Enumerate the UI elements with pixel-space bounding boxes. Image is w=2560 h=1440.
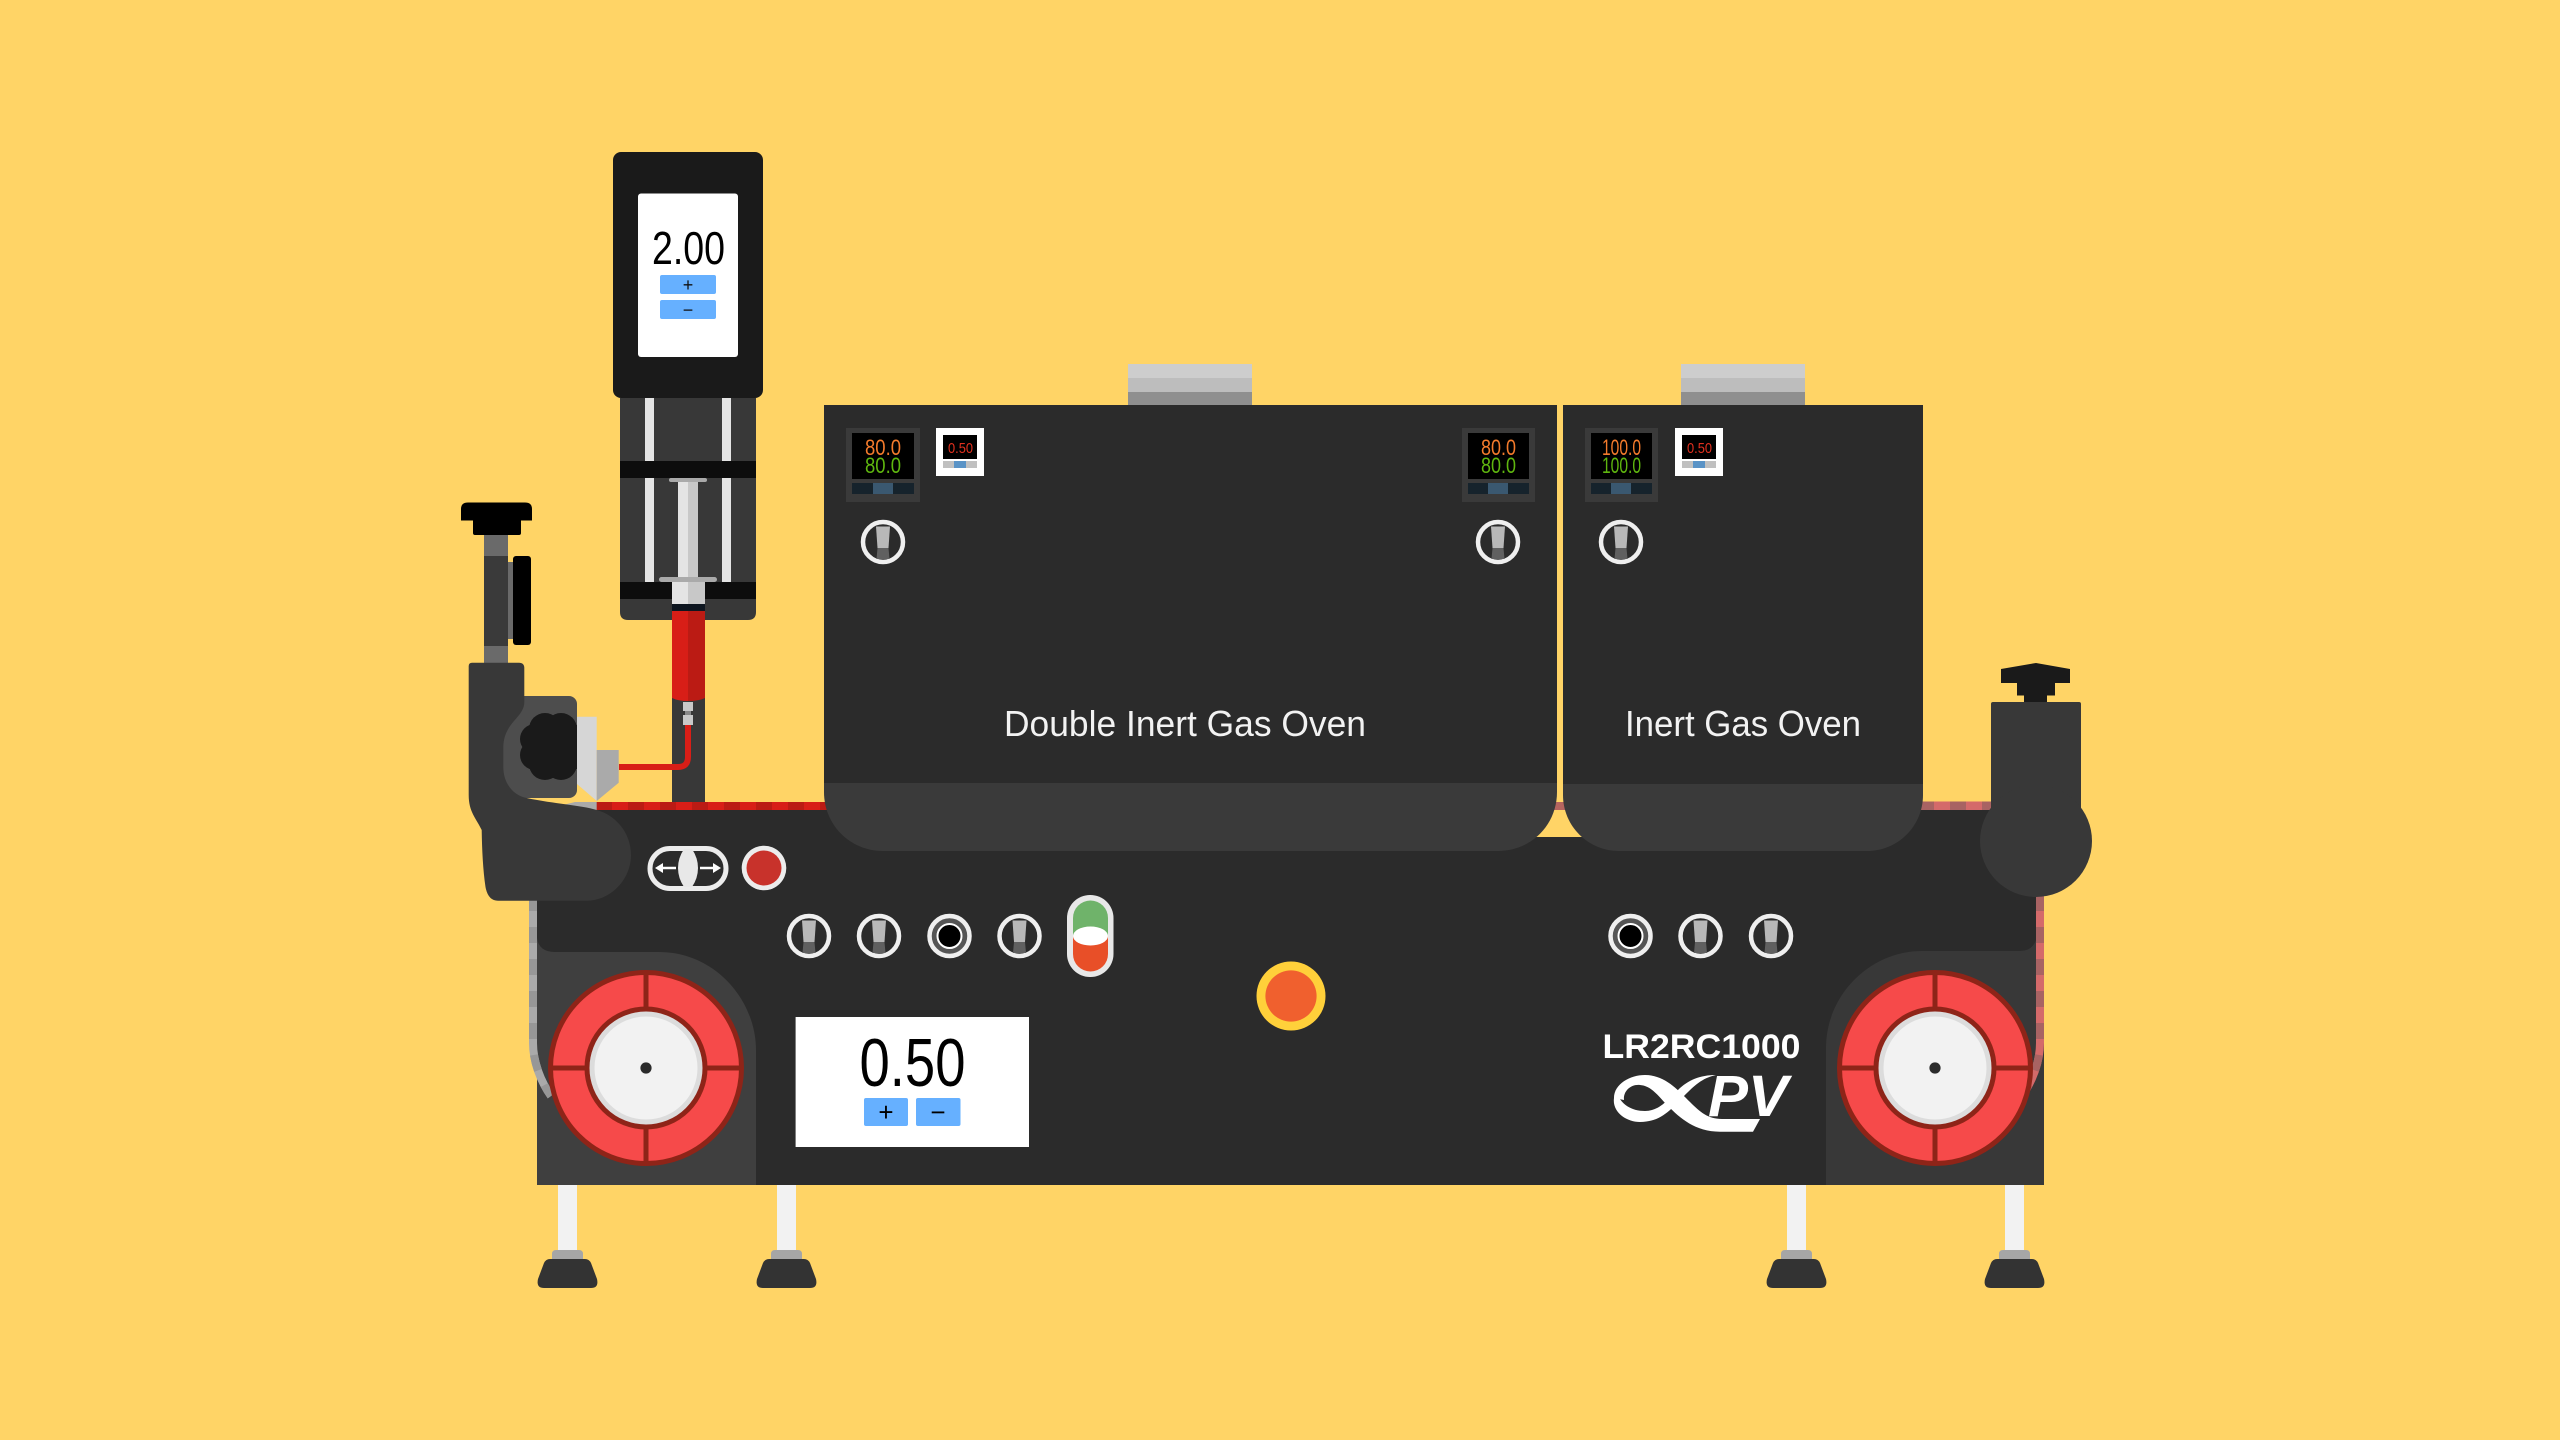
- single oven lower band: [1563, 784, 1923, 851]
- speed plus button: +: [878, 1097, 894, 1127]
- roller housing: [503, 696, 577, 798]
- right wheel panel: [1826, 940, 2044, 1185]
- pressure gauge 1: 0.50: [948, 440, 973, 457]
- right knob: [2001, 663, 2070, 702]
- pump plus button: +: [683, 275, 693, 295]
- direction selector: [650, 848, 726, 888]
- pump readout: 2.00: [652, 222, 725, 274]
- oven switch 1: [863, 522, 903, 562]
- temperature controller 3: 100.0: [1602, 435, 1641, 460]
- single oven: [1563, 364, 1923, 851]
- support column: [672, 698, 705, 804]
- brand logo: [1614, 1064, 1792, 1132]
- front switches right: [1610, 916, 1791, 956]
- double oven body: [824, 405, 1557, 783]
- legs and feet: [538, 1185, 2044, 1288]
- arm body: [469, 663, 631, 901]
- model name: LR2RC1000: [1602, 1028, 1800, 1066]
- right arm body: [1980, 702, 2092, 897]
- temperature controller 3: [1585, 428, 1658, 502]
- single oven body: [1563, 405, 1923, 784]
- oven switch 2: [1478, 522, 1518, 562]
- pump screen: [638, 194, 738, 357]
- clamp bands: [620, 461, 756, 599]
- start stop capsule: [1067, 895, 1114, 977]
- right spool: [1839, 972, 2031, 1164]
- pressure gauge 2: [1675, 428, 1723, 476]
- guide rails: [645, 398, 731, 582]
- temperature controller 2: [1462, 428, 1535, 502]
- double oven: [824, 364, 1557, 851]
- temperature controller 1: [846, 428, 920, 502]
- temperature controller 1: 80.0: [865, 453, 901, 478]
- belt: pink section: [1550, 802, 2004, 811]
- dispenser head: [613, 152, 763, 804]
- temperature controller 3: 100.0: [1602, 453, 1641, 478]
- single oven handle: [1681, 364, 1805, 405]
- emergency stop: [1256, 962, 1326, 1030]
- double oven label: Double Inert Gas Oven: [1004, 703, 1366, 744]
- temperature controller 2: 80.0: [1481, 435, 1516, 460]
- pressure gauge 2: 0.50: [1687, 440, 1712, 457]
- speed minus button: −: [930, 1097, 946, 1127]
- machine body: [537, 810, 2036, 1185]
- oven switch 3: [1601, 522, 1641, 562]
- pump housing: [613, 152, 763, 398]
- speed minus button: [916, 1097, 960, 1127]
- left wheel panel: [537, 938, 756, 1185]
- left return belt: [533, 895, 551, 1096]
- scalloped roller: [520, 713, 577, 780]
- gap between ovens: [1528, 810, 1586, 837]
- pump plus button: [660, 275, 716, 295]
- speed control panel: [796, 1017, 1029, 1147]
- tension knob: [461, 502, 532, 535]
- pump minus button: −: [683, 300, 693, 320]
- nozzle block: [563, 717, 619, 810]
- belt: red section: [596, 802, 832, 811]
- side bracket: [513, 556, 531, 645]
- temperature controller 2: 80.0: [1481, 453, 1516, 478]
- double oven lower band: [824, 783, 1557, 851]
- brand logo: PV: [1708, 1064, 1792, 1129]
- left tension arm: [461, 502, 631, 901]
- syringe: [659, 478, 717, 725]
- right return belt: [2022, 895, 2040, 1096]
- speed plus button: [864, 1097, 908, 1127]
- red indicator button: [742, 846, 786, 890]
- front switches left: [789, 916, 1040, 956]
- tension shaft: [484, 535, 513, 663]
- single oven label: Inert Gas Oven: [1625, 703, 1861, 744]
- left spool: [550, 972, 742, 1164]
- right tension arm: [1980, 663, 2092, 897]
- dispenser carriage: [620, 398, 756, 620]
- temperature controller 1: 80.0: [865, 435, 901, 460]
- double oven handle: [1128, 364, 1252, 405]
- speed readout: 0.50: [860, 1025, 966, 1101]
- pressure gauge 1: [936, 428, 984, 476]
- pump minus button: [660, 300, 716, 320]
- dispensing tube: [619, 725, 688, 767]
